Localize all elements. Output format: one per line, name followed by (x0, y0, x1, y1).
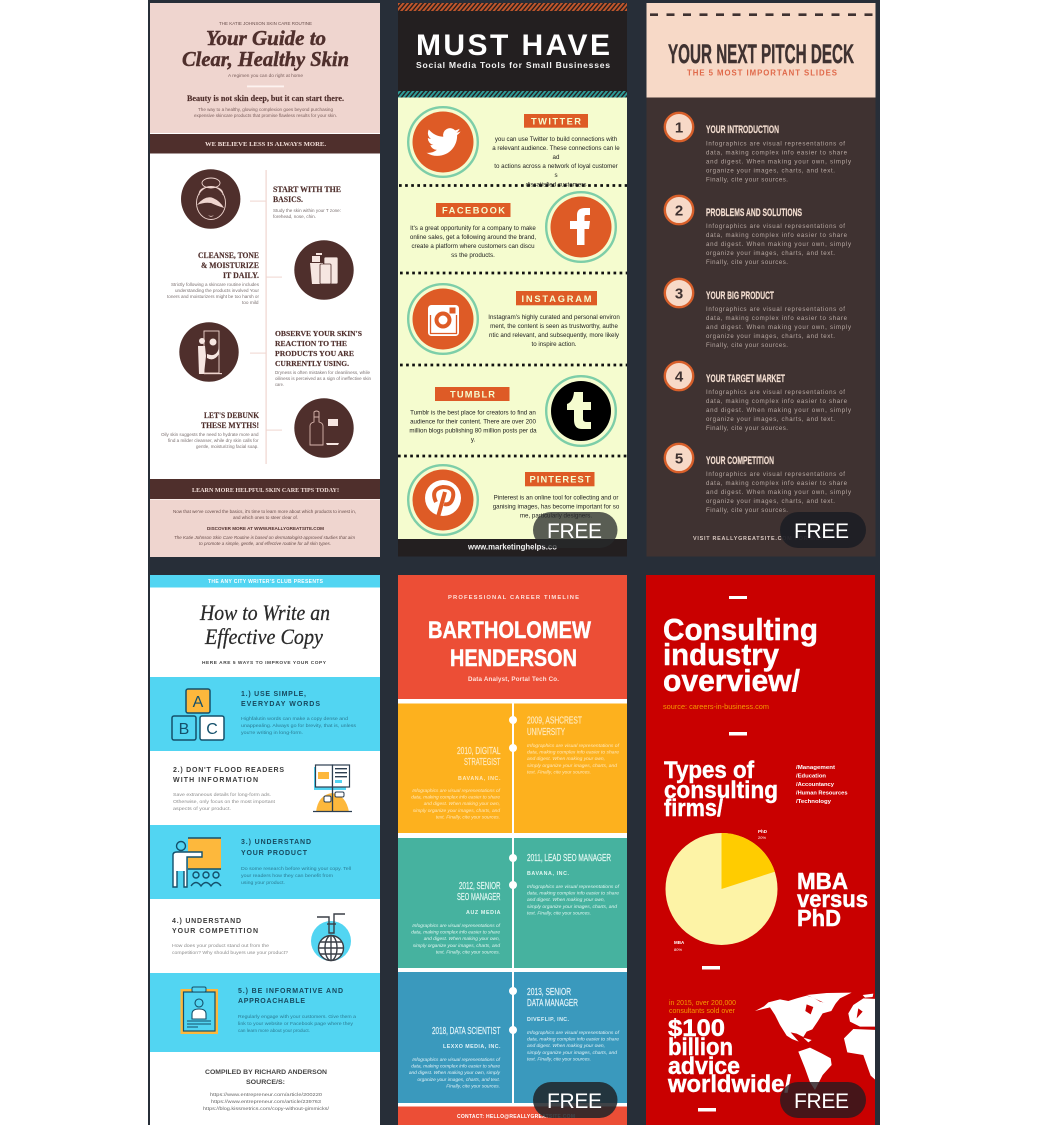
header: career timeline: HENDERSON (450, 645, 577, 672)
entry: 2013 senior data manager: data, making complex info easier to share (527, 1037, 619, 1043)
badge: free: FREE (547, 520, 602, 543)
text: start with the basics: BASICS. (273, 195, 303, 204)
entry: 2009 ashcrest university: and digest. When making your own, (527, 756, 605, 762)
text: observe your skin's reaction (275, 329, 372, 387)
credits and sources: https://blog.kissmetrics.com/copy-without-gimmicks/ (203, 1106, 330, 1112)
entry: 2010 digital strategist (411, 746, 501, 820)
section 1: use simple words (150, 677, 380, 751)
pie chart: MBA vs PhD: 20% (758, 835, 766, 840)
entry: 2011 lead seo manager: Infographics are visual representations of (527, 884, 620, 890)
step 3: your big product: and digest. When making your own, simply (706, 324, 852, 331)
section 2: don't flood readers: aspects of your product. (173, 806, 231, 812)
section 2: don't flood readers: WITH INFORMATION (173, 777, 258, 784)
badge: free (780, 512, 866, 548)
entry: 2012 senior seo manager: data, making complex info easier to share (411, 930, 500, 936)
footer block: skin care: DISCOVER MORE AT WWW.REALLYGREATSITE.COM (207, 526, 324, 531)
step 3: your big product: Finally, cite your sources. (706, 342, 788, 349)
step 1: your introduction: 1 (675, 120, 683, 136)
footer block: skin care: and which ones to steer clear of. (233, 515, 298, 520)
step 2: problems and solutions: Finally, cite your sources. (706, 259, 788, 266)
footer: contact: CONTACT: HELLO@REALLYGREATSITE.COM (457, 1114, 575, 1120)
section: instagram: INSTAGRAM (522, 294, 592, 304)
entry: 2009 ashcrest university: UNIVERSITY (527, 727, 565, 738)
text: start with the basics: START WITH THE (273, 185, 341, 194)
heading: MBA versus PhD: MBA (797, 868, 848, 894)
step 5: your competition: 5 (675, 450, 683, 468)
title: how to write an effective copy: How to Write an (199, 600, 330, 625)
header block: skin care: Beauty is not skin deep, but it can start there. (187, 93, 344, 103)
header: pitch deck: YOUR NEXT PITCH DECK (668, 39, 854, 69)
text: let's debunk these myths: Oily skin suggests the need to hydrate more and (161, 432, 259, 437)
pie chart: MBA vs PhD (666, 829, 778, 952)
pie chart: MBA vs PhD: MBA (674, 940, 685, 945)
section 4: understand your competition: How does your product stand out from the (172, 943, 269, 949)
heading: MBA versus PhD (796, 872, 868, 926)
header block: skin care: A regimen you can do right at home (228, 73, 303, 79)
icon: ABC blocks: C (206, 721, 218, 738)
entry: 2009 ashcrest university: data, making complex info easier to share (527, 750, 619, 756)
text: observe your skin's reaction: CURRENTLY USING. (275, 359, 349, 368)
text: observe your skin's reaction: PRODUCTS YOU ARE (275, 349, 354, 358)
header block: skin care: THE KATIE JOHNSON SKIN CARE ROUTINE (219, 21, 312, 26)
stat: $100 billion advice worldwide: worldwide/ (667, 1071, 791, 1098)
step 1: your introduction: Finally, cite your sources. (706, 176, 788, 184)
section: tumblr: million blogs publishing 80 million posts per da (409, 428, 537, 434)
banner: we believe less is always more: WE BELIEVE LESS IS ALWAYS MORE. (205, 141, 326, 148)
header block: skin care: Clear, Healthy Skin (182, 47, 349, 71)
stat: $100 billion advice worldwide: advice (668, 1053, 740, 1080)
text: cleanse, tone and moisturize: CLEANSE, TONE (198, 251, 259, 260)
entry: 2010 digital strategist: 2010, DIGITAL (457, 746, 501, 757)
entry: 2012 senior seo manager (411, 881, 501, 955)
entry: 2018 data scientist: data, making complex info easier to share (411, 1064, 500, 1070)
step 4: your target market (665, 362, 852, 432)
text: start with the basics: forehead, nose, chin. (273, 214, 316, 219)
timeline spine and connectors (250, 170, 282, 464)
icon: ABC blocks: A (193, 694, 204, 711)
section 1: use simple words: 1.) USE SIMPLE, (241, 691, 306, 698)
entry: 2012 senior seo manager: 2012, SENIOR (459, 881, 500, 892)
header block: skin care: The way to a healthy, glowing complexion goes beyond purchasing (198, 107, 334, 112)
footer block: skin care: Now that we've covered the basics, it's time to learn more about which products to invest in, (173, 509, 356, 514)
step 5: your competition: organize your images, charts, and text. (706, 498, 835, 505)
stat: $100 billion advice worldwide: consultants sold over (669, 1006, 735, 1015)
section: facebook: ss the products. (451, 252, 495, 259)
step 2: problems and solutions: and digest. When making your own, simply (706, 241, 852, 248)
footer: marketing helps: www.marketinghelps.co (467, 542, 557, 552)
entry: 2013 senior data manager: 2013, SENIOR (527, 987, 571, 998)
entry: 2012 senior seo manager: Infographics are visual representations of (412, 923, 501, 929)
heading: types of consulting firms: consulting (664, 777, 778, 804)
title: how to write an effective copy: HERE ARE 5 WAYS TO IMPROVE YOUR COPY (202, 660, 327, 666)
section: tumblr: TUMBLR (450, 390, 495, 400)
badge: free (533, 512, 618, 548)
list: firm types: /Accountancy (796, 782, 835, 788)
panel: pitch deck (646, 3, 876, 556)
section 3: understand your product (150, 825, 380, 899)
list: firm types: /Technology (796, 799, 832, 805)
step 1: your introduction: YOUR INTRODUCTION (706, 124, 779, 136)
stat: $100 billion advice worldwide (667, 998, 791, 1098)
entry: 2013 senior data manager (527, 987, 620, 1062)
section: twitter (492, 114, 620, 188)
entry: 2011 lead seo manager: data, making complex info easier to share (527, 891, 619, 897)
stat: $100 billion advice worldwide: $100 (668, 1015, 725, 1042)
step 2: problems and solutions (665, 196, 852, 266)
entry: 2011 lead seo manager: 2011, LEAD SEO MANAGER (527, 853, 611, 864)
source line: source: careers-in-business.com (663, 702, 769, 711)
footer block: skin care: to promote a simple, gentle, and effective routine for all skin types. (199, 541, 331, 546)
heading: MBA versus PhD: PhD (797, 905, 841, 931)
entry: 2013 senior data manager: Infographics are visual representations of (527, 1030, 620, 1036)
section: twitter: ad (553, 154, 560, 161)
header: career timeline (398, 575, 627, 699)
section 5: be informative: link to your website or Facebook page where they (238, 1021, 354, 1027)
section: twitter: TWITTER (531, 116, 581, 126)
text: let's debunk these myths: THESE MYTHS! (201, 421, 259, 430)
header: pitch deck: THE 5 MOST IMPORTANT SLIDES (687, 68, 837, 78)
title: consulting industry overview: Consulting (663, 612, 818, 647)
section 4: understand your competition: YOUR COMPETITION (172, 928, 258, 935)
entry: 2009 ashcrest university: 2009, ASHCREST (527, 716, 582, 726)
section 5: be informative: APPROACHABLE (238, 998, 305, 1005)
entry: 2009 ashcrest university: text. Finally, cite your sources. (527, 769, 591, 775)
text: cleanse, tone and moisturize (167, 251, 260, 305)
entry: 2009 ashcrest university: simply organize your images, charts, and (527, 763, 617, 769)
decorative white dashes (698, 596, 747, 1112)
text: let's debunk these myths: gentle, moisturizing facial soap. (196, 444, 258, 449)
section: facebook (410, 203, 536, 259)
list: firm types: /Human Resources (796, 790, 848, 796)
text: observe your skin's reaction: care. (275, 382, 284, 387)
badge: free: FREE (794, 520, 849, 543)
timeline spine with dots (509, 703, 517, 1103)
section 3: understand your product: your readers how they can benefit from (241, 873, 333, 879)
header: career timeline: PROFESSIONAL CAREER TIMELINE (448, 595, 579, 601)
header: must have (398, 3, 627, 98)
section: pinterest: PINTEREST (530, 474, 591, 484)
text: start with the basics (273, 185, 341, 219)
top bar: writers club (150, 575, 380, 588)
icon: skincare products (294, 240, 354, 300)
entry: 2010 digital strategist: Infographics are visual representations of (412, 788, 501, 794)
badge: free: FREE (547, 1090, 602, 1113)
text: let's debunk these myths: LET'S DEBUNK (204, 411, 260, 420)
section 3: understand your product: Do some research before writing your copy. Tell (241, 866, 351, 872)
step 4: your target market: 4 (675, 368, 684, 386)
entry: 2018 data scientist: Finally, cite your sources. (446, 1083, 500, 1089)
section: instagram: ntic and relevant, and subsequently, more likely (489, 332, 620, 339)
section: tumblr: audience for their content. There are over 200 (410, 418, 536, 426)
section 3: understand your product: using your product. (241, 880, 285, 886)
icon: open book on plant (313, 765, 352, 812)
panel: consulting overview (646, 575, 877, 1125)
step 2: problems and solutions: data, making complex info easier to share (706, 232, 848, 239)
step 3: your big product: Infographics are visual representations of (706, 306, 845, 313)
step 4: your target market: YOUR TARGET MARKET (706, 373, 785, 385)
panel: skin care guide (150, 3, 380, 557)
badge: free (780, 1082, 866, 1118)
step 3: your big product: 3 (675, 286, 683, 302)
icon: serum bottle and jar (294, 398, 354, 458)
section: facebook: create a platform where customers can discu (411, 243, 535, 250)
step 4: your target market: organize your images, charts, and text. (706, 416, 835, 423)
credits and sources (203, 1069, 330, 1112)
title: how to write an effective copy (199, 600, 330, 666)
step 5: your competition: YOUR COMPETITION (706, 455, 774, 467)
step 4: your target market: data, making complex info easier to share (706, 398, 848, 405)
section 5: be informative (150, 973, 380, 1052)
step 1: your introduction (665, 113, 852, 184)
section 4: understand your competition (172, 918, 288, 956)
icon: ABC blocks: B (179, 721, 189, 738)
footer block: skin care: The Katie Johnson Skin Care Routine is based on dermatologist-approved studies that aim (174, 535, 355, 540)
section: instagram: to inspire action. (531, 341, 577, 348)
banner: we believe less is always more (150, 134, 380, 154)
text: observe your skin's reaction: Dryness is often mistaken for cleanliness, while (275, 370, 371, 375)
heading: MBA versus PhD: versus (797, 886, 868, 912)
icon: pinterest (408, 465, 478, 535)
section 2: don't flood readers: Save extraneous details for long-form ads. (173, 792, 271, 798)
section 1: use simple words: Highfalutin words can make a copy dense and (241, 716, 348, 722)
panel: social media tools (398, 3, 627, 556)
header: must have: MUST HAVE (416, 29, 610, 62)
stat: $100 billion advice worldwide: billion (668, 1034, 733, 1061)
step 1: your introduction: and digest. When making your own, simply (706, 158, 852, 166)
icon: clipboard profile (180, 987, 218, 1034)
icon: presenter with audience (173, 838, 221, 887)
section: twitter: a relevant audience. These connections can le (492, 145, 620, 152)
header: pitch deck (646, 3, 876, 98)
section: instagram: Instagram's highly curated and personal environ (488, 314, 620, 321)
title: consulting industry overview: industry (663, 637, 780, 672)
text: cleanse, tone and moisturize: understanding the products involved Your (175, 288, 260, 293)
text: cleanse, tone and moisturize: IT DAILY. (223, 271, 259, 280)
step 5: your competition: and digest. When making your own, simply (706, 489, 852, 496)
section 5: be informative: 5.) BE INFORMATIVE AND (238, 988, 343, 995)
title: how to write an effective copy: Effective Copy (204, 624, 323, 649)
pie chart: MBA vs PhD: PhD (758, 829, 768, 834)
icon: twitter (408, 107, 478, 177)
section 4: understand your competition: 4.) UNDERSTAND (172, 918, 241, 925)
section 2: don't flood readers: Otherwise, only focus on the most important (173, 799, 276, 805)
list: firm types: /Management (796, 765, 835, 771)
step 2: problems and solutions: 2 (675, 202, 683, 220)
section: twitter: you can use Twitter to build connections with (495, 136, 618, 143)
entry: 2012 senior seo manager: SEO MANAGER (457, 892, 500, 903)
entry: 2010 digital strategist: STRATEGIST (464, 757, 500, 768)
credits and sources: https://www.entrepreneur.com/article/200220 (210, 1092, 322, 1098)
section 5: be informative: can learn more about your product. (238, 1028, 310, 1034)
heading: types of consulting firms: firms/ (664, 795, 723, 822)
section 1: use simple words: you're writing in long-form. (241, 730, 303, 736)
credits and sources: COMPILED BY RICHARD ANDERSON (205, 1069, 327, 1076)
entry: 2010 digital strategist: simply organize your images, charts, and (413, 808, 500, 814)
step 5: your competition: Finally, cite your sources. (706, 507, 788, 514)
step 3: your big product: YOUR BIG PRODUCT (706, 290, 774, 302)
step 5: your competition: Infographics are visual representations of (706, 471, 845, 478)
heading: types of consulting firms: Types of (664, 757, 755, 784)
text: cleanse, tone and moisturize: too mild (242, 300, 259, 305)
title: consulting industry overview (664, 618, 816, 692)
stat: $100 billion advice worldwide: in 2015, over 200,000 (669, 998, 736, 1007)
section: tumblr (409, 387, 537, 444)
list: firm types: /Education (796, 774, 827, 780)
entry: 2010 digital strategist: text. Finally, cite your sources. (436, 814, 500, 820)
entry: 2010 digital strategist: and digest. When making your own, (424, 801, 500, 807)
entry: 2012 senior seo manager: text. Finally, cite your sources. (436, 949, 500, 955)
step 4: your target market: Finally, cite your sources. (706, 425, 788, 432)
entry: 2013 senior data manager: and digest. When making your own, (527, 1043, 605, 1049)
icon: face with hair bun (181, 169, 240, 229)
step 4: your target market: Infographics are visual representations of (706, 389, 845, 396)
header: career timeline: Data Analyst, Portal Tech Co. (468, 676, 559, 683)
top bar: writers club: THE ANY CITY WRITER'S CLUB PRESENTS (208, 579, 324, 585)
step 2: problems and solutions: Infographics are visual representations of (706, 223, 845, 230)
step 2: problems and solutions: organize your images, charts, and text. (706, 250, 835, 257)
step 1: your introduction: data, making complex info easier to share (706, 150, 848, 156)
entry: 2012 senior seo manager: simply organize your images, charts, and (413, 943, 500, 949)
icon: person at mirror (179, 322, 239, 382)
step 3: your big product: organize your images, charts, and text. (706, 333, 835, 340)
section: pinterest (493, 472, 620, 520)
section: pinterest: Pinterest is an online tool for collecting and or (494, 494, 618, 502)
section 4: understand your competition: competition? Why should buyers use your product? (172, 950, 288, 956)
text: cleanse, tone and moisturize: Strictly following a skincare routine includes (171, 282, 259, 287)
entry: 2013 senior data manager: simply organize your images, charts, and (527, 1050, 617, 1056)
icon: disco globe (311, 914, 351, 961)
section 1: use simple words: EVERYDAY WORDS (241, 701, 320, 708)
section: facebook: FACEBOOK (442, 206, 505, 216)
section 2: don't flood readers: 2.) DON'T FLOOD READERS (173, 767, 284, 774)
header: career timeline: BARTHOLOMEW (428, 617, 592, 644)
text: cleanse, tone and moisturize: toners and moisturizers might be too harsh or (167, 294, 260, 299)
list: firm types (796, 765, 848, 805)
step 4: your target market: and digest. When making your own, simply (706, 407, 852, 414)
panel: career timeline (398, 575, 627, 1125)
section: facebook: online sales, get a following around the brand, (410, 234, 536, 241)
footer block: skin care (150, 500, 380, 557)
section 3: understand your product: 3.) UNDERSTAND (241, 839, 311, 846)
entry: 2018 data scientist: Infographics are visual representations of (412, 1057, 501, 1063)
title: consulting industry overview: overview/ (663, 663, 800, 698)
badge: free: FREE (794, 1090, 849, 1113)
section: facebook: It's a great opportunity for a company to make (410, 225, 536, 232)
entry: 2013 senior data manager: DIVEFLIP, INC. (527, 1017, 570, 1023)
section 5: be informative: Regularly engage with your customers. Give them a (238, 1014, 356, 1020)
heading: types of consulting firms (664, 760, 777, 817)
entry: 2013 senior data manager: text. Finally, cite your sources. (527, 1056, 591, 1062)
entry: 2012 senior seo manager: AUZ MEDIA (466, 910, 501, 916)
header: must have: Social Media Tools for Small Businesses (416, 60, 610, 70)
world map (755, 993, 877, 1090)
dotted dividers (398, 186, 627, 456)
pie chart: MBA vs PhD: 80% (674, 947, 682, 952)
section: pinterest: me, particularly designers. (520, 512, 592, 520)
dark gallery background (148, 0, 880, 1125)
entry: 2009 ashcrest university (527, 716, 620, 775)
badge: free (533, 1082, 618, 1118)
text: observe your skin's reaction: REACTION TO THE (275, 339, 347, 348)
text: observe your skin's reaction: oiliness is perceived as a sign of ineffective skin (275, 376, 372, 381)
credits and sources: https://www.entrepreneur.com/article/239763 (211, 1099, 321, 1105)
section: pinterest: ganising images, has become important for so (493, 504, 620, 510)
entry: 2018 data scientist: and digest. When making your own, simply (409, 1070, 501, 1076)
credits and sources: SOURCE/S: (246, 1079, 285, 1086)
section 1: use simple words: unappealing. Always go for brevity, that is, unless (241, 723, 357, 729)
timeline section backgrounds (398, 704, 627, 1125)
entry: 2011 lead seo manager: text. Finally, cite your sources. (527, 910, 591, 916)
entry: 2011 lead seo manager (527, 853, 620, 916)
icon: ABC blocks (172, 689, 224, 740)
section: instagram (488, 291, 620, 348)
text: cleanse, tone and moisturize: & MOISTURIZE (201, 261, 259, 270)
text: observe your skin's reaction: OBSERVE YOUR SKIN'S (275, 329, 362, 338)
step 1: your introduction: organize your images, charts, and text. (706, 168, 835, 174)
entry: 2010 digital strategist: BAVANA, INC. (458, 776, 501, 782)
icon: tumblr (546, 376, 616, 446)
section: tumblr: y. (471, 436, 475, 444)
section: instagram: ment, the content is seen as trustworthy, authe (490, 323, 618, 330)
header block: skin care (150, 3, 380, 133)
header block: skin care: expensive skincare products that promise flawless results for your skin. (194, 113, 337, 118)
panel: effective copy (150, 575, 380, 1125)
step 2: problems and solutions: PROBLEMS AND SOLUTIONS (706, 207, 802, 219)
step 1: your introduction: Infographics are visual representations of (706, 140, 845, 148)
entry: 2010 digital strategist: data, making complex info easier to share (411, 795, 500, 801)
entry: 2013 senior data manager: DATA MANAGER (527, 998, 578, 1009)
section: twitter: s (554, 172, 558, 179)
header block: skin care: Your Guide to (206, 26, 326, 50)
step 3: your big product (665, 279, 852, 349)
section: twitter: dissatisfied customers (526, 182, 586, 188)
entry: 2018 data scientist: organize your images, charts, and text. (417, 1077, 500, 1083)
section 3: understand your product: YOUR PRODUCT (241, 850, 308, 857)
text: start with the basics: Study the skin within your T zone: (273, 208, 341, 213)
entry: 2018 data scientist (409, 1026, 501, 1089)
footer: visit site: VISIT REALLYGREATSITE.COM FOR MORE (693, 536, 829, 542)
text: let's debunk these myths (161, 411, 260, 449)
icon: instagram (408, 284, 478, 354)
entry: 2018 data scientist: LEXXO MEDIA, INC. (443, 1044, 501, 1050)
text: let's debunk these myths: find a milder cleanser, while dry skin calls for (168, 438, 259, 443)
section: tumblr: Tumblr is the best place for creators to find an (410, 410, 536, 416)
banner: learn more: LEARN MORE HELPFUL SKIN CARE TIPS TODAY! (192, 487, 339, 494)
step 5: your competition (665, 444, 852, 514)
icon: facebook (546, 192, 616, 262)
footer: marketing helps (398, 539, 627, 556)
step 3: your big product: data, making complex info easier to share (706, 315, 848, 322)
banner: learn more (150, 479, 380, 499)
entry: 2011 lead seo manager: and digest. When making your own, (527, 897, 605, 903)
step 5: your competition: data, making complex info easier to share (706, 480, 848, 487)
entry: 2018 data scientist: 2018, DATA SCIENTIST (432, 1026, 500, 1037)
section 2: don't flood readers (173, 767, 284, 812)
entry: 2012 senior seo manager: and digest. When making your own, (424, 936, 500, 942)
section: twitter: to actions across a network of loyal customer (494, 163, 618, 170)
entry: 2011 lead seo manager: simply organize your images, charts, and (527, 904, 617, 910)
entry: 2011 lead seo manager: BAVANA, INC. (527, 871, 570, 877)
entry: 2009 ashcrest university: Infographics are visual representations of (527, 743, 620, 749)
